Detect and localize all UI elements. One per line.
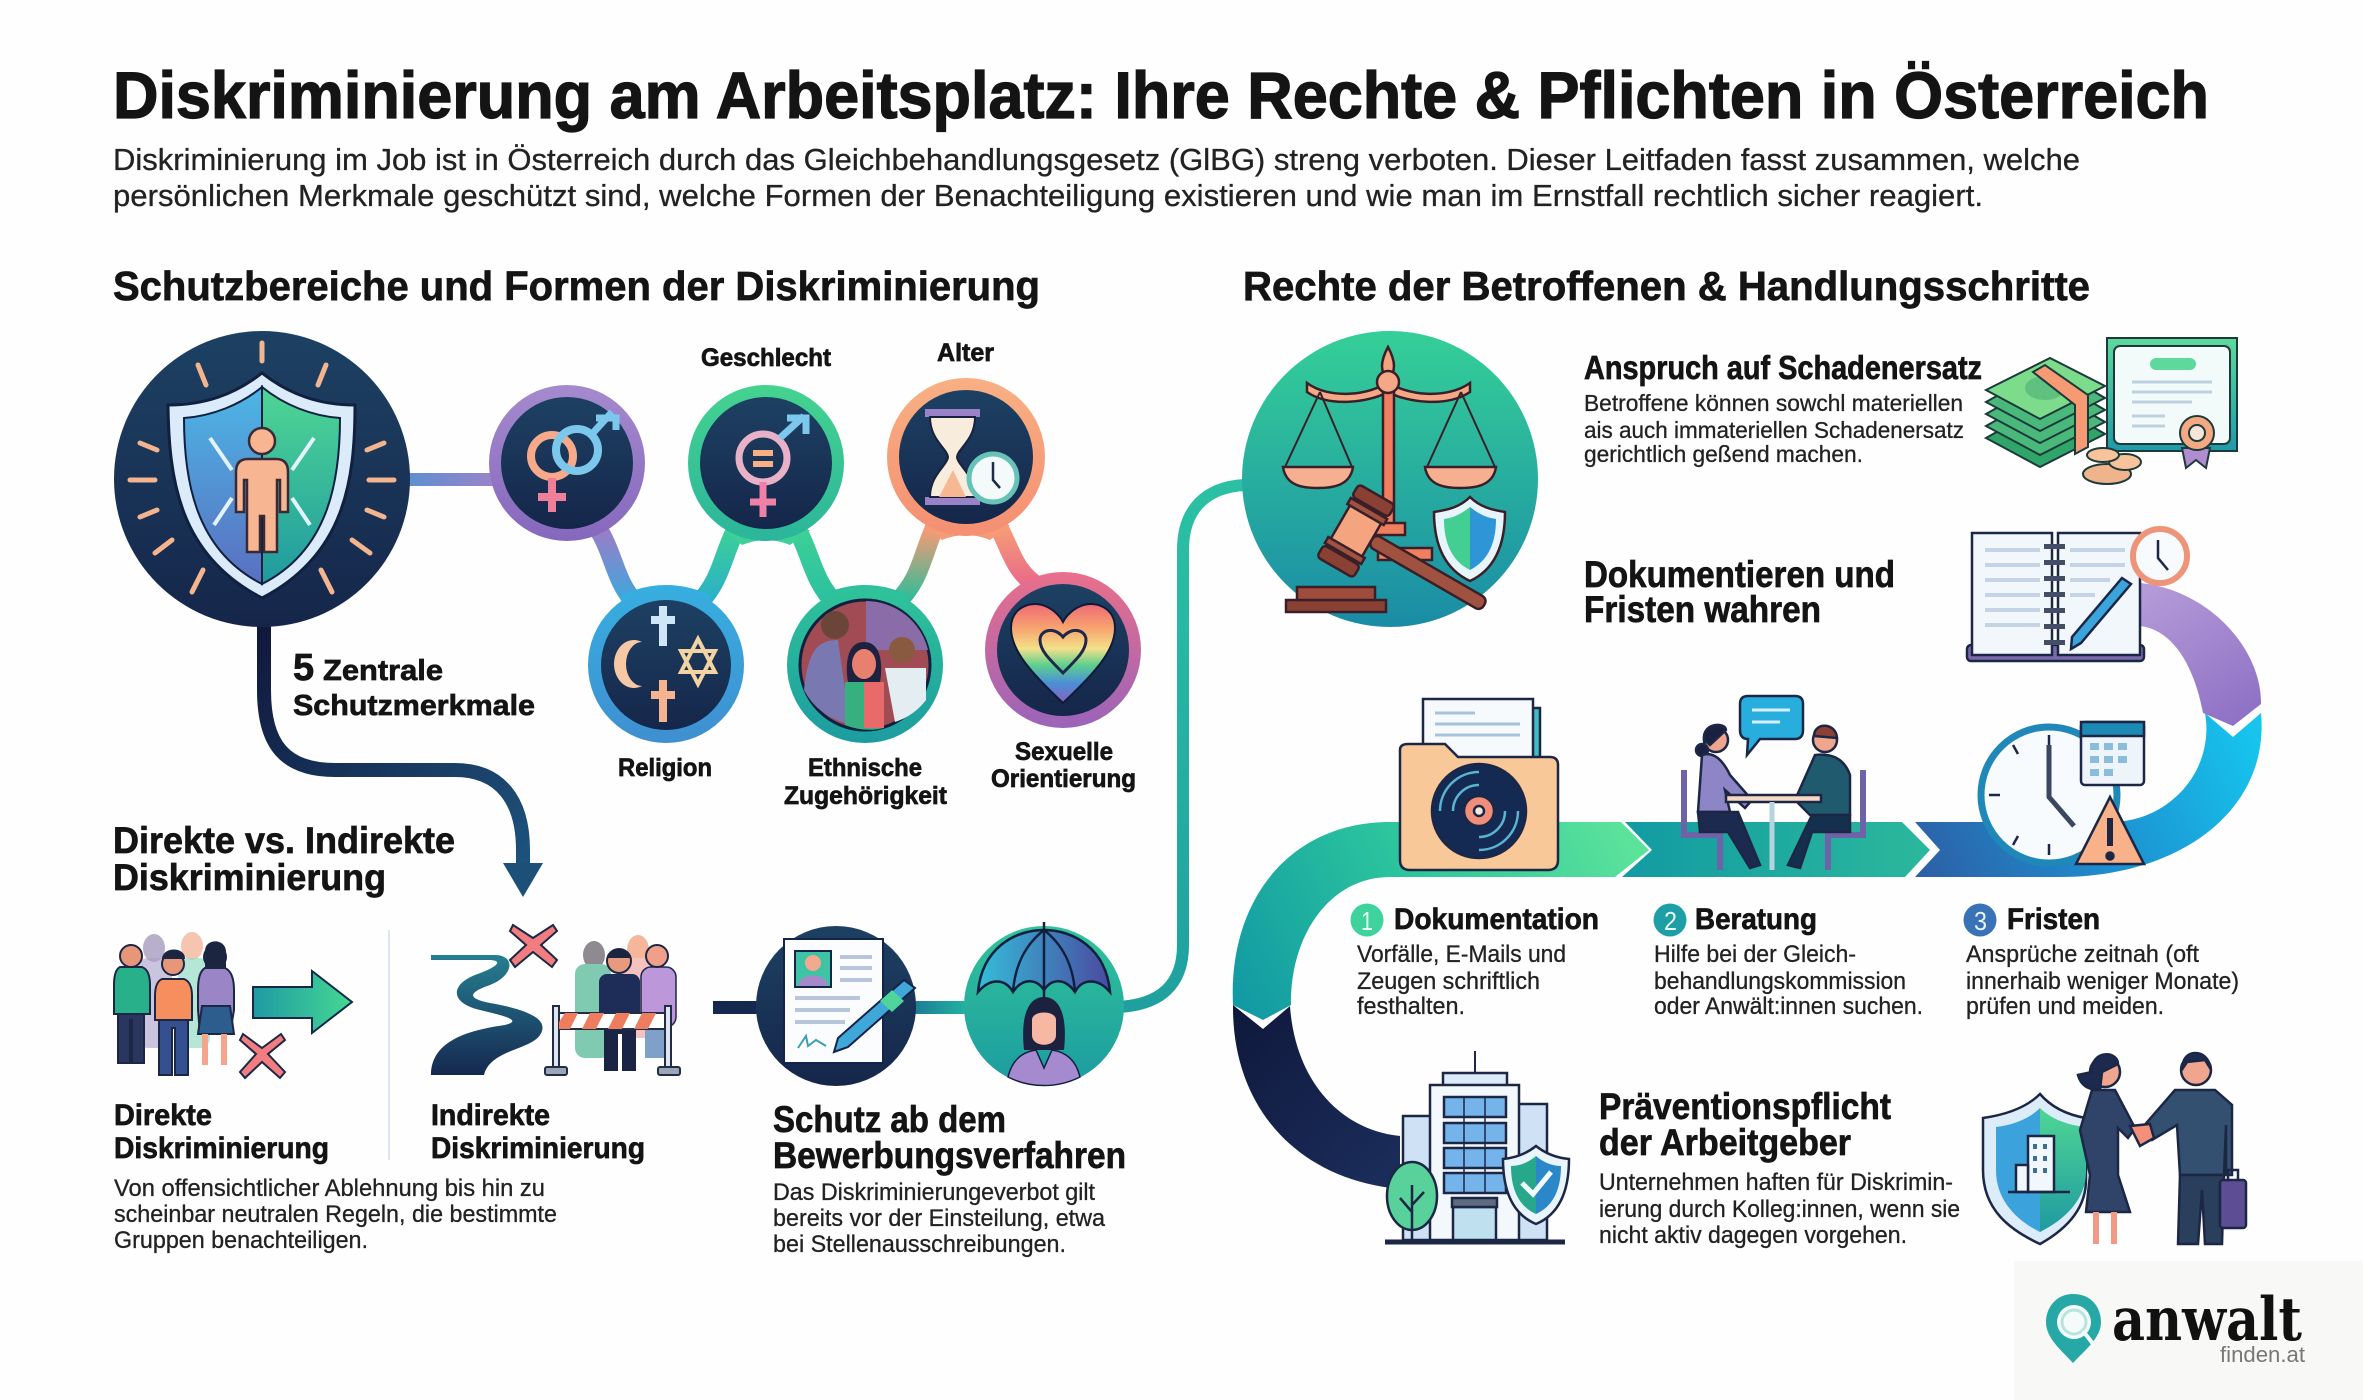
text: damages: [1584, 390, 1964, 467]
label: 5 Zentrale Schutzmerkmale: [293, 647, 535, 722]
label: 5 Zentrale Schutzmerkmale: Schutzmerkmale: [293, 690, 535, 722]
icon: shield and handshake: [1983, 1053, 2246, 1244]
icon: bubble rainbow heart: [985, 572, 1141, 728]
arrow: direct discrimination: [253, 971, 352, 1033]
label: Ethnische Zugehörigkeit: Zugehörigkeit: [784, 782, 948, 810]
label: Geschlecht: Geschlecht: [701, 344, 832, 372]
arrow: navy arc: [1233, 1005, 1400, 1189]
arrow: blue arc: [1915, 713, 2262, 877]
icon: application document: [756, 926, 916, 1086]
icon: bubble gender equality: [688, 385, 844, 541]
step 2: Beratung: [1654, 903, 1923, 1020]
step 2: Beratung: 2: [1664, 906, 1677, 936]
intro text: persönlichen Merkmale geschützt sind, welche Formen der Benachteiligung existieren und wie man im Ernstfall rechtlich sicher reagiert.: [113, 178, 1983, 213]
icon: bubble religion symbols: [588, 587, 744, 743]
step 3: Fristen: prüfen und meiden.: [1966, 993, 2164, 1020]
arrow: teal segment: [1622, 822, 1930, 877]
heading: left section: Schutzbereiche und Formen der Diskriminierung: [113, 263, 1040, 309]
heading: Schutz ab dem Bewerbungsverfahren: Schutz ab dem: [773, 1099, 1006, 1140]
heading: Direkte vs. Indirekte Diskriminierung: [113, 820, 455, 898]
step 2: Beratung: Beratung: [1695, 903, 1817, 936]
arrow: green arc: [1233, 822, 1649, 1020]
icon: bubble diverse people: [787, 587, 943, 743]
heading: Präventionspflicht der Arbeitgeber: der Arbeitgeber: [1599, 1122, 1851, 1163]
heading: Schutz ab dem Bewerbungsverfahren: Bewerbungsverfahren: [773, 1135, 1126, 1176]
icon: scales, gavel and shield: [1242, 331, 1538, 641]
label: Ethnische Zugehörigkeit: Ethnische: [808, 754, 922, 782]
heading: Direkte vs. Indirekte Diskriminierung: Direkte vs. Indirekte: [113, 820, 455, 861]
step 2: Beratung: Hilfe bei der Gleich-: [1654, 941, 1856, 968]
step 3: Fristen: 3: [1974, 906, 1987, 936]
step 1: Dokumentation: festhalten.: [1357, 993, 1465, 1020]
intro text: [113, 142, 2080, 213]
links between protected characteristic bubbles: [592, 520, 1040, 612]
arrow: purple arc: [2140, 583, 2261, 726]
text: damages: Betroffene können sowchl materiellen: [1584, 390, 1963, 416]
heading: Dokumentieren und Fristen wahren: Dokumentieren und: [1584, 554, 1895, 595]
title: Diskriminierung am Arbeitsplatz: Ihre Rechte & Pflichten in Österreich: [113, 58, 2209, 132]
heading: Anspruch auf Schadenersatz: Anspruch auf Schadenersatz: [1584, 349, 1982, 386]
label: 5 Zentrale Schutzmerkmale: Zentrale: [323, 655, 443, 687]
label: Indirekte Diskriminierung: Indirekte: [431, 1099, 550, 1132]
icon: people behind barrier: [545, 935, 680, 1075]
icon: woman under umbrella: [964, 922, 1124, 1086]
connector: to resume: [713, 1001, 763, 1014]
icon: bubble hourglass and clock: [887, 378, 1045, 536]
icon: money, coins and certificate: [1986, 338, 2237, 484]
connector: resume to umbrella: [910, 1001, 968, 1014]
step 3: Fristen: [1964, 903, 2239, 1020]
icon: red cross indirect: [510, 925, 557, 967]
step 1: Dokumentation: Dokumentation: [1394, 903, 1599, 936]
step 2: Beratung: behandlungskommission: [1654, 968, 1906, 995]
text: application protection: Das Diskriminierungeverbot gilt: [773, 1179, 1095, 1206]
logo: anwalt finden.at: finden.at: [2220, 1342, 2305, 1367]
label: Direkte Diskriminierung: [114, 1099, 329, 1165]
label: Direkte Diskriminierung: Diskriminierung: [114, 1132, 329, 1165]
icon: notebook and clock: [1967, 529, 2187, 661]
heading: Dokumentieren und Fristen wahren: Fristen wahren: [1584, 589, 1821, 630]
step 3: Fristen: Ansprüche zeitnah (oft: [1966, 941, 2199, 968]
text: direct vs indirect description: Gruppen benachteiligen.: [114, 1227, 368, 1254]
divider: [388, 930, 390, 1160]
heading: Schutz ab dem Bewerbungsverfahren: [773, 1099, 1126, 1176]
label: 5 Zentrale Schutzmerkmale: 5: [293, 647, 314, 689]
icon: shield with person: [114, 331, 410, 627]
label: Ethnische Zugehörigkeit: [784, 754, 948, 810]
text: damages: gerichtlich geßend machen.: [1584, 441, 1863, 467]
text: employer duty: nicht aktiv dagegen vorgehen.: [1599, 1222, 1907, 1249]
step 2: Beratung: oder Anwält:innen suchen.: [1654, 993, 1923, 1020]
icon: consultation meeting: [1684, 696, 1863, 870]
heading: Direkte vs. Indirekte Diskriminierung: Diskriminierung: [113, 857, 386, 898]
text: employer duty: Unternehmen haften für Diskrimin-: [1599, 1169, 1953, 1196]
text: employer duty: ierung durch Kolleg:innen, wenn sie: [1599, 1196, 1960, 1223]
label: Sexuelle Orientierung: Sexuelle: [1015, 738, 1113, 766]
logo: anwalt finden.at: anwalt: [2112, 1285, 2302, 1355]
text: damages: ais auch immateriellen Schadenersatz: [1584, 417, 1964, 443]
heading: right section: Rechte der Betroffenen & Handlungsschritte: [1243, 263, 2090, 309]
step 3: Fristen: Fristen: [2007, 903, 2100, 936]
icon: office building with tree and shield: [1385, 1051, 1569, 1242]
step 3: Fristen: innerhaib weniger Monate): [1966, 968, 2239, 995]
step 1: Dokumentation: Vorfälle, E-Mails und: [1357, 941, 1566, 968]
connector bar: shield to protected characteristics: [400, 473, 500, 486]
icon: winding road: [431, 955, 543, 1075]
intro text: Diskriminierung im Job ist in Österreich durch das Gleichbehandlungsgesetz (GlBG) streng verboten. Dieser Leitfaden fasst zusammen, welche: [113, 142, 2080, 177]
connector: umbrella to justice circle: [1118, 485, 1245, 1007]
text: employer duty: [1599, 1169, 1960, 1249]
text: application protection: [773, 1179, 1106, 1258]
heading: Dokumentieren und Fristen wahren: [1584, 554, 1895, 630]
label: Direkte Diskriminierung: Direkte: [114, 1099, 212, 1132]
arrow: shield to direct vs indirect: [264, 620, 543, 897]
icon: group of people direct discrimination: [114, 932, 234, 1075]
step 1: Dokumentation: 1: [1361, 906, 1373, 936]
label: Indirekte Diskriminierung: [431, 1099, 645, 1165]
text: direct vs indirect description: Von offensichtlicher Ablehnung bis hin zu: [114, 1175, 545, 1202]
heading: Präventionspflicht der Arbeitgeber: [1599, 1086, 1891, 1163]
label: Sexuelle Orientierung: [991, 738, 1136, 793]
label: Indirekte Diskriminierung: Diskriminierung: [431, 1132, 645, 1165]
step 1: Dokumentation: [1350, 903, 1599, 1020]
text: application protection: bereits vor der Einsteilung, etwa: [773, 1205, 1106, 1232]
label: Sexuelle Orientierung: Orientierung: [991, 765, 1136, 793]
icon: bubble gender symbols: [489, 385, 645, 541]
step 1: Dokumentation: Zeugen schriftlich: [1357, 968, 1540, 995]
text: direct vs indirect description: [114, 1175, 557, 1254]
label: Alter: Alter: [937, 339, 994, 367]
text: application protection: bei Stellenausschreibungen.: [773, 1231, 1066, 1258]
label: Religion: Religion: [618, 754, 712, 782]
text: direct vs indirect description: scheinbar neutralen Regeln, die bestimmte: [114, 1201, 557, 1228]
heading: Präventionspflicht der Arbeitgeber: Präventionspflicht: [1599, 1086, 1891, 1127]
icon: red cross direct: [240, 1034, 285, 1078]
icon: clock, calendar and warning: [1981, 722, 2144, 864]
icon: folder with record: [1400, 699, 1558, 870]
logo: anwalt finden.at: [2014, 1261, 2363, 1400]
